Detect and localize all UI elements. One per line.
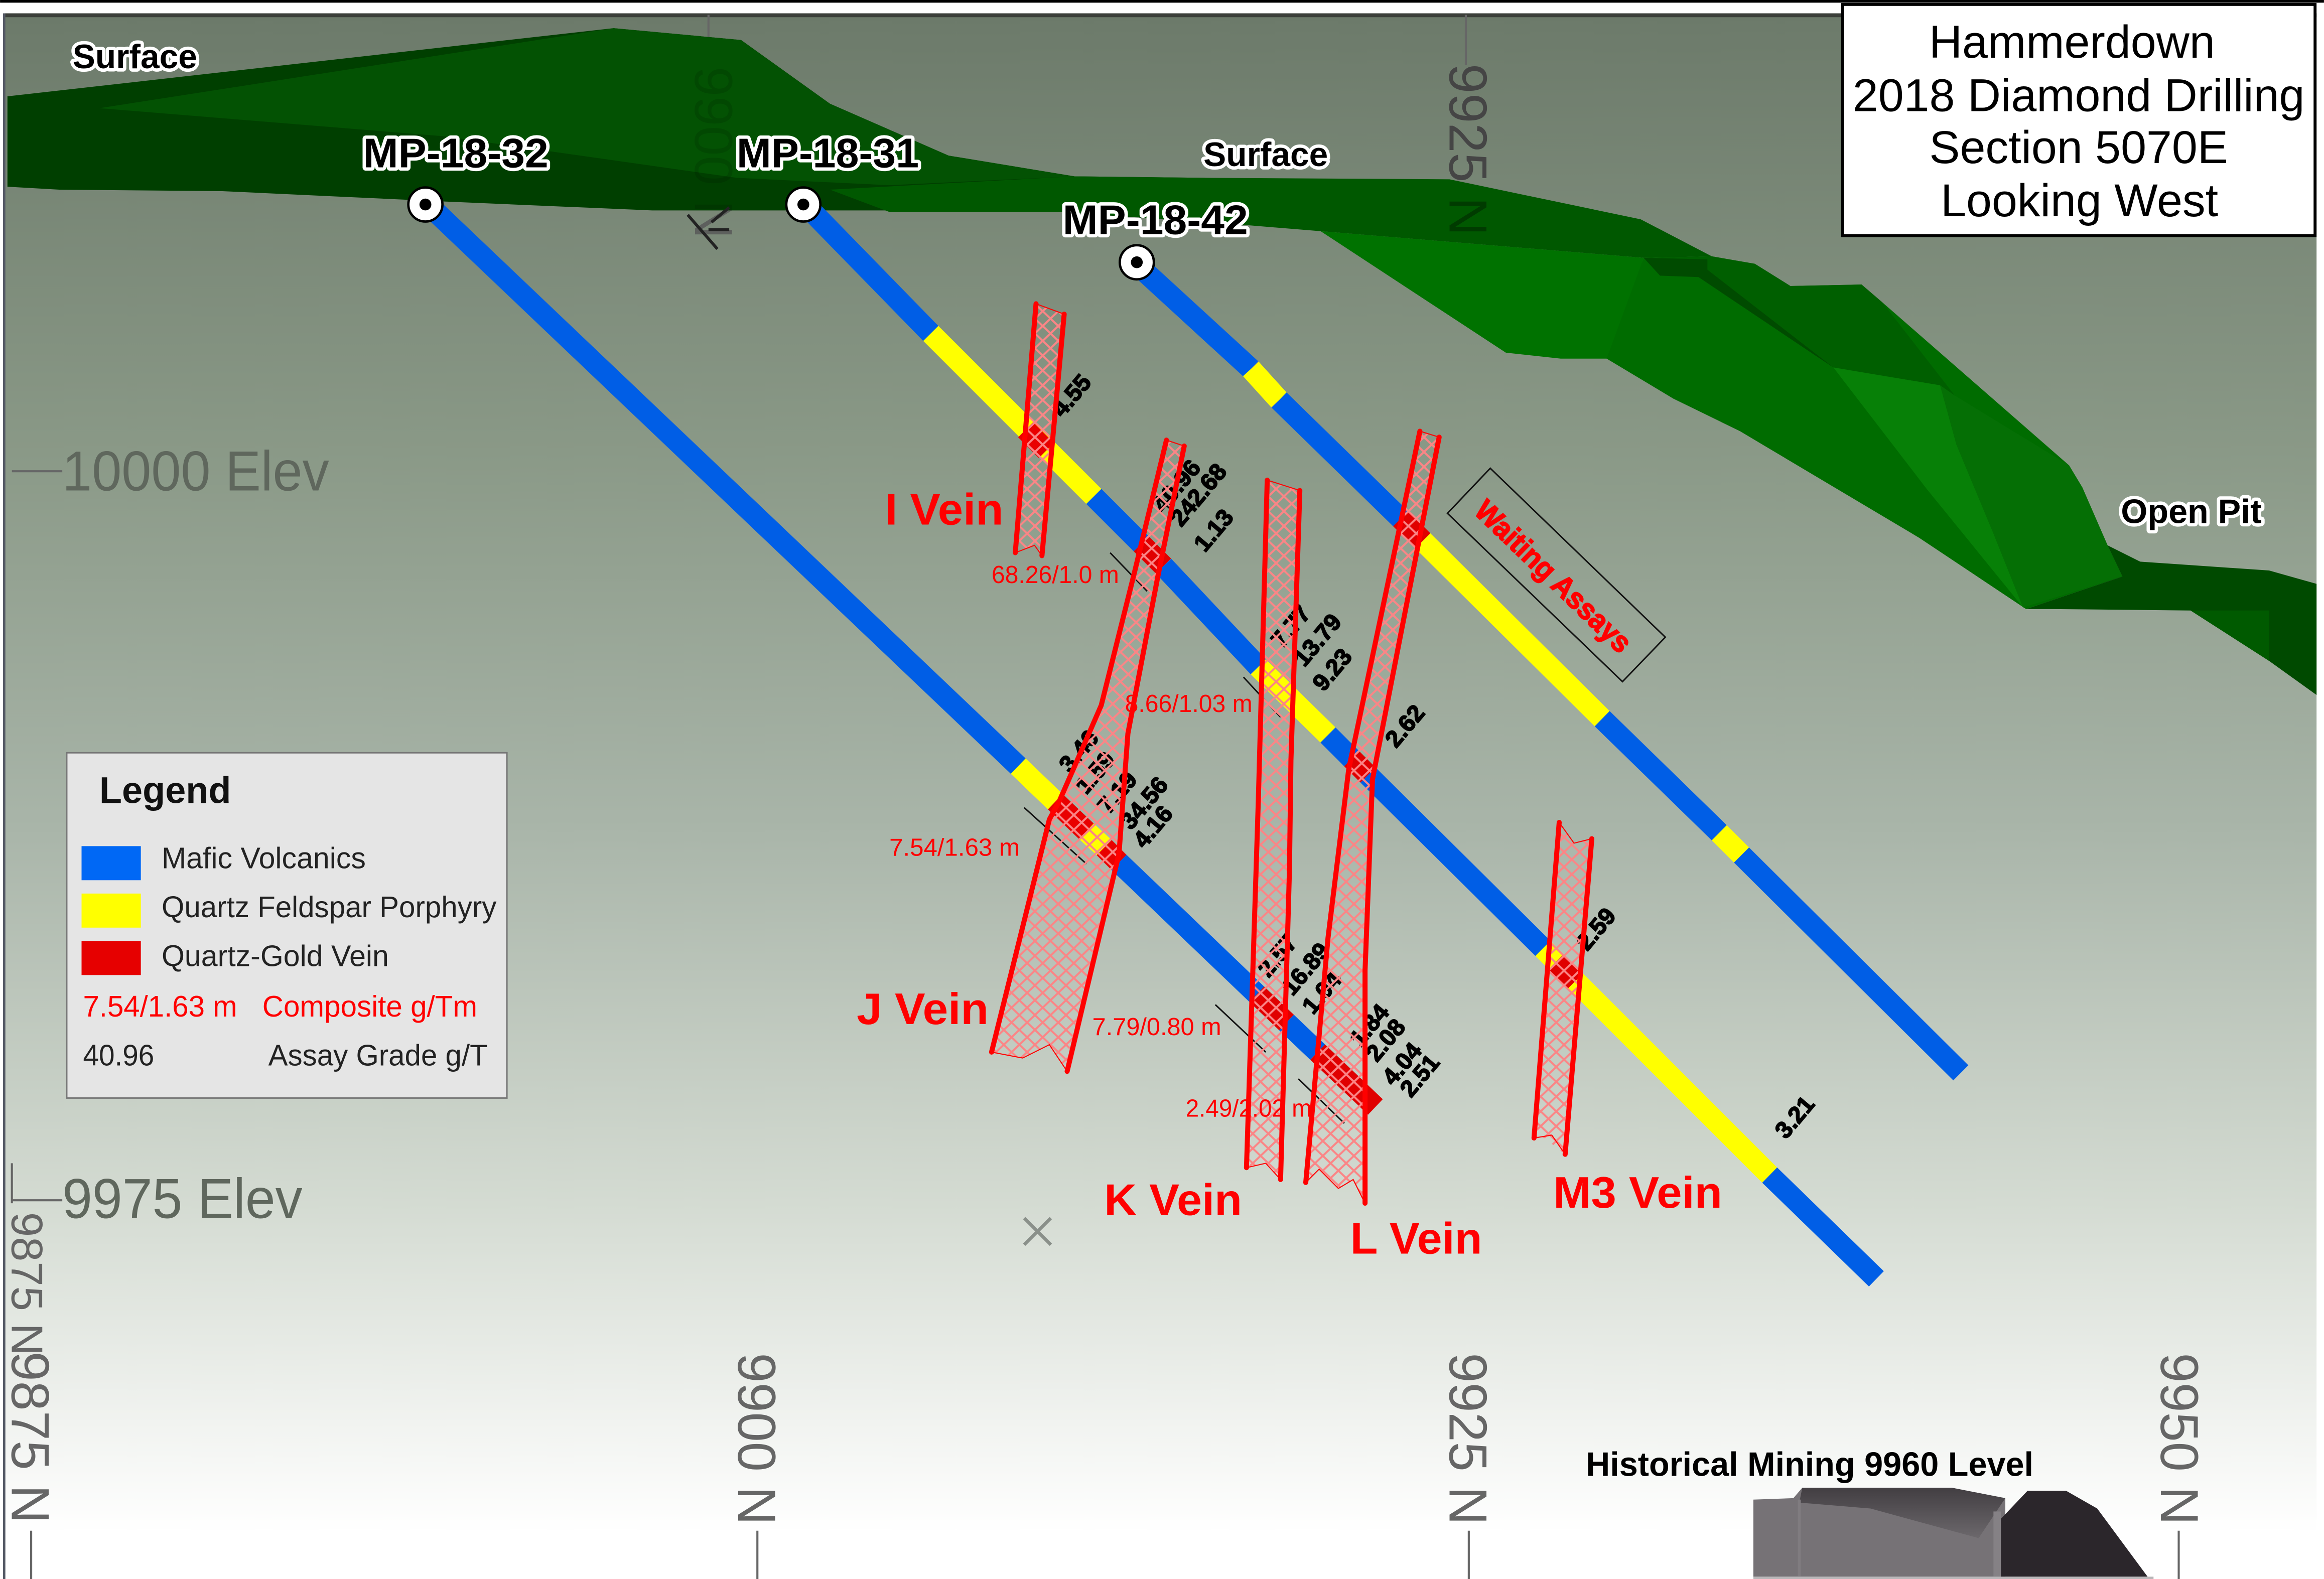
- grid label: 9900 N bottom: 9900 N: [727, 1353, 786, 1525]
- assay labels: K Vein lower: 1.04: [1297, 966, 1347, 1019]
- vein names: I Vein: [885, 484, 1003, 534]
- assay labels: K Vein lower: 16.89: [1277, 938, 1335, 1000]
- legend item: Quartz-Gold Vein: [82, 940, 389, 975]
- composite grade labels: 7.79/0.80 m: [1092, 1014, 1221, 1041]
- hole and feature labels: Surface: [1203, 136, 1328, 174]
- surface: open pit tail: [2026, 545, 2316, 695]
- assay labels: J Vein lower: 34.56: [1115, 772, 1173, 834]
- surface: dark lower left: [8, 28, 1248, 225]
- vein: L Vein shape: [1306, 431, 1439, 1203]
- title box: Hammerdown: [1929, 17, 2215, 68]
- heading: historical mining level: Historical Mining 9960 Level: [1586, 1446, 2033, 1484]
- composite grade labels: 2.49/2.02 m: [1186, 1095, 1312, 1122]
- title box: Section 5070E: [1929, 122, 2228, 173]
- title box: [1842, 5, 2315, 236]
- callout: waiting assays: [1447, 468, 1665, 682]
- assay labels: K Vein upper: 7.77: [1266, 601, 1316, 653]
- legend item: Quartz Feldspar Porphyry: Quartz Feldspar Porphyry: [162, 891, 497, 924]
- vein names: L Vein: [1350, 1214, 1482, 1263]
- intercept tick lines: [1024, 553, 1344, 1123]
- assay labels: J Vein upper: 1.13: [1189, 504, 1239, 557]
- hole and feature labels: Open Pit: [2121, 493, 2262, 531]
- grid label: 9925 N bottom: 9925 N: [1438, 1353, 1497, 1525]
- assay labels: J Vein lower: 4.16: [1128, 801, 1178, 853]
- assay labels: K Vein upper: 9.23: [1307, 644, 1357, 696]
- surface topography: green section: [8, 28, 2316, 695]
- legend item: assay grade: 40.96: [83, 1039, 154, 1072]
- composite grade labels: 8.66/1.03 m: [1125, 690, 1253, 717]
- legend item: assay grade: [83, 1039, 488, 1072]
- assay labels: L Vein upper: 2.62: [1380, 700, 1430, 752]
- hole and feature labels: MP-18-42: [1063, 197, 1248, 243]
- assay labels: L Vein lower: 2.08: [1361, 1014, 1411, 1067]
- legend item: composite grade: Composite g/Tm: [262, 990, 477, 1023]
- hole and feature labels: MP-18-31: [737, 130, 919, 177]
- vein names: [857, 484, 1722, 1263]
- legend item: composite grade: [83, 990, 477, 1023]
- vein names: K Vein: [1104, 1175, 1242, 1225]
- callout: waiting assays: Waiting Assays: [1468, 494, 1638, 659]
- assay labels: M3 Vein: 3.21: [1770, 1091, 1820, 1143]
- legend item: Quartz-Gold Vein: Quartz-Gold Vein: [162, 940, 389, 973]
- collar marker: MP-18-32: [408, 188, 443, 222]
- assay labels: J Vein lower: 7.19: [1092, 767, 1143, 819]
- grid label seen through surface: 9925 N: 9925 N: [1438, 64, 1497, 236]
- historical mining workings: [1753, 1488, 2153, 1579]
- surface: middle band: [830, 176, 1712, 258]
- legend item: composite grade: 7.54/1.63 m: [83, 990, 237, 1023]
- surface: ridge shadow: [1644, 256, 1955, 396]
- vein: I Vein shape: [1015, 304, 1064, 556]
- assay labels: J Vein lower: [1054, 725, 1178, 853]
- vein: K Vein shape: [1247, 480, 1300, 1180]
- assay labels: K Vein upper: 13.79: [1288, 609, 1347, 671]
- title box: 2018 Diamond Drilling: [1853, 70, 2304, 121]
- assay labels: J Vein upper: 40.96: [1148, 455, 1206, 517]
- grid remnants over surface: [683, 64, 1497, 1245]
- grid label: 9925 N top: 9925 N: [1438, 64, 1497, 236]
- grid remnants over surface: 9900 N: [683, 67, 743, 239]
- assay labels: M3 Vein: 2.59: [1571, 903, 1621, 955]
- assay labels: J Vein lower: 3.46: [1054, 725, 1104, 778]
- elevation label: 9975 Elev: 9975 Elev: [62, 1167, 303, 1230]
- assay labels: L Vein lower: 1.84: [1344, 999, 1395, 1052]
- collar marker: MP-18-31: [786, 188, 821, 222]
- title box: Looking West: [1941, 175, 2218, 226]
- surface: lighter upper left: [99, 28, 1074, 185]
- assay labels: I Vein: 4.55: [1046, 369, 1097, 422]
- assay labels: M3 Vein: [1571, 903, 1820, 1143]
- assay labels: L Vein lower: 2.51: [1395, 1050, 1445, 1102]
- assay labels: J Vein lower: 1.59: [1070, 747, 1120, 799]
- grid label: 9875 N upper: 9875 N: [3, 1212, 52, 1356]
- grid label: 9875 N bottom: 9875 N: [1, 1351, 60, 1523]
- assay labels: K Vein lower: 2.57: [1253, 930, 1303, 982]
- assay labels: L Vein lower: 4.04: [1377, 1038, 1427, 1090]
- legend item: Mafic Volcanics: Mafic Volcanics: [162, 842, 366, 875]
- hole and feature labels: MP-18-32: [363, 130, 549, 177]
- legend item: assay grade: Assay Grade g/T: [268, 1039, 488, 1072]
- vein: J Vein shape: [992, 440, 1184, 1071]
- assay labels: K Vein lower: [1253, 930, 1347, 1019]
- assay labels: K Vein upper: [1266, 601, 1357, 696]
- assay labels: L Vein lower: [1344, 999, 1445, 1102]
- composite grade labels: 68.26/1.0 m: [992, 561, 1119, 589]
- surface: crease shadow: [1644, 258, 1833, 367]
- surface: main slope: [1607, 256, 2122, 609]
- grid label: 9950 N bottom: 9950 N: [2149, 1353, 2209, 1525]
- drill hole MP-18-42 trace: [1144, 271, 1961, 1073]
- composite grade labels: 7.54/1.63 m: [889, 834, 1020, 862]
- surface: open pit tail lighter: [2191, 611, 2269, 661]
- surface: lit facet: [1321, 231, 1644, 359]
- surface: bright central facet: [1833, 367, 2023, 608]
- collar marker: MP-18-42: [1120, 245, 1154, 279]
- composite grade labels: [889, 561, 1312, 1122]
- drill hole MP-18-32 trace: [436, 212, 1376, 1107]
- assay labels: J Vein upper: 242.68: [1165, 459, 1232, 531]
- vein: M3 Vein shape: [1534, 822, 1592, 1155]
- legend item: Mafic Volcanics: [82, 842, 366, 880]
- vein names: M3 Vein: [1553, 1168, 1722, 1217]
- grid label: 9900 N top: 9900 N: [683, 67, 743, 239]
- panel: legend: [67, 753, 507, 1098]
- vein names: J Vein: [857, 984, 989, 1034]
- surface: right shoulder: [1940, 385, 2122, 608]
- drill hole MP-18-31 trace: [812, 212, 1876, 1279]
- mark: cross symbol: [1024, 1218, 1051, 1245]
- legend heading: Legend: [99, 770, 231, 811]
- hole and feature labels: Surface: [73, 38, 197, 76]
- mark: grid tick near MP-18-31: [688, 207, 729, 249]
- hole and feature labels: [73, 38, 2262, 531]
- assay labels: J Vein upper: [1148, 455, 1239, 557]
- elevation label: 10000 Elev: 10000 Elev: [62, 440, 329, 503]
